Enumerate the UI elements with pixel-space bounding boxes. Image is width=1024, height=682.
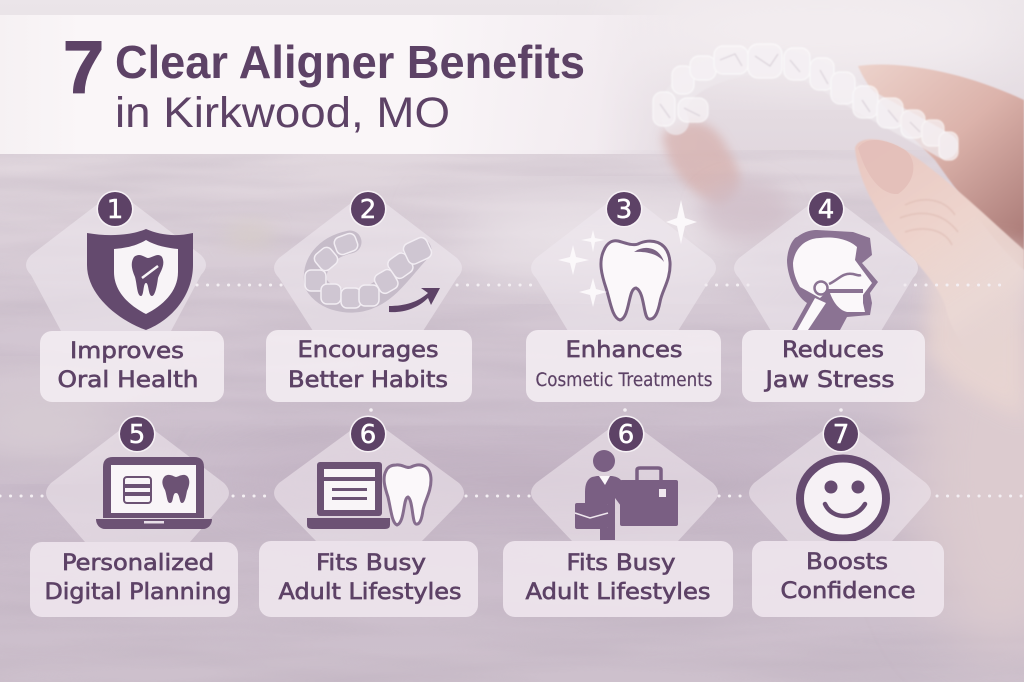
label: improves oral health: Improves [70, 339, 184, 364]
badge number 6: 6 [360, 420, 376, 450]
badge number 4: 4 [818, 195, 834, 225]
panel: benefit 4 reduces jaw stress [734, 190, 925, 402]
aligner tray [653, 44, 958, 160]
soft shadow under rear finger [700, 180, 790, 240]
panel: benefit 2 encourages better habits [266, 190, 472, 402]
badge number 1 [96, 190, 134, 228]
title numeral: 7 [63, 26, 104, 109]
badge number 4 [808, 190, 844, 228]
badge number 7 [822, 416, 860, 452]
title line one: Clear Aligner Benefits [115, 36, 585, 88]
badge number 3 [606, 190, 642, 228]
icon: shield with tooth [87, 229, 193, 330]
label: personalized digital planning: Digital Planning [44, 580, 232, 605]
label: reduces jaw stress: Reduces [782, 338, 884, 363]
badge number 1: 1 [107, 195, 123, 225]
label: fits busy adult lifestyles: Adult Lifestyles [278, 580, 462, 605]
badge number 5: 5 [129, 420, 145, 450]
icon: laptop with tooth plan [96, 457, 212, 529]
label: fits busy adult lifestyles second [503, 541, 733, 617]
icon: clear aligner with arrow [305, 232, 440, 312]
label: fits busy adult lifestyles [259, 541, 478, 617]
label: encourages better habits [266, 330, 472, 402]
badge number 2: 2 [360, 195, 376, 225]
badge number 5 [118, 416, 156, 452]
label: reduces jaw stress: Jaw Stress [763, 368, 894, 393]
icon: laptop and tooth [307, 462, 431, 529]
badge number 6 second: 6 [618, 420, 634, 450]
label: boosts confidence [752, 541, 944, 617]
label: encourages better habits: Better Habits [288, 368, 448, 393]
badge number 2 [350, 190, 386, 228]
badge number 3: 3 [616, 195, 632, 225]
label: improves oral health: Oral Health [58, 368, 198, 393]
title line two: in Kirkwood, MO [115, 89, 450, 137]
label: reduces jaw stress [742, 330, 925, 402]
label: boosts confidence: Boosts [806, 550, 888, 575]
label: encourages better habits: Encourages [298, 338, 438, 363]
label: fits busy adult lifestyles: Fits Busy [316, 551, 426, 576]
blurred rear fingertip [662, 122, 740, 205]
label: enhances cosmetic treatments [526, 330, 721, 402]
thumb creases [900, 200, 958, 245]
label: personalized digital planning: Personalized [62, 551, 214, 576]
panel: benefit 6 duplicate, person with briefcases [503, 416, 733, 617]
icon: businessperson with briefcases [575, 450, 678, 540]
thumb nail [858, 140, 913, 194]
icon: head profile showing jaw [787, 230, 878, 330]
index finger and palm shadow [858, 64, 1024, 270]
title band [0, 15, 700, 154]
label: boosts confidence: Confidence [780, 579, 916, 604]
icon: sparkling tooth [558, 200, 697, 320]
badge number 6 second [608, 416, 644, 452]
photo: hand holding clear aligner [653, 44, 1024, 420]
label: enhances cosmetic treatments: Cosmetic Treatments [536, 369, 712, 391]
dotted connector row one [197, 284, 1003, 286]
label: improves oral health [40, 331, 224, 402]
panel: benefit 5 personalized digital planning [30, 416, 238, 617]
label: fits busy adult lifestyles second: Adult Lifestyles [526, 580, 710, 605]
thumb [855, 139, 1024, 390]
icon: smiley face [800, 458, 886, 538]
panel: benefit 6 fits busy adult lifestyles [259, 416, 478, 617]
connector dots between rows [369, 408, 843, 412]
panel: benefit 3 enhances cosmetic treatments [526, 190, 721, 402]
panel: benefit 1 improves oral health [26, 190, 224, 402]
label: personalized digital planning [30, 542, 238, 617]
badge number 6 [350, 416, 386, 452]
panel: benefit 7 boosts confidence [749, 416, 944, 617]
palm fade [925, 243, 1024, 420]
label: fits busy adult lifestyles second: Fits Busy [566, 551, 676, 576]
label: enhances cosmetic treatments: Enhances [566, 338, 682, 363]
dotted connector row two [0, 494, 1024, 498]
badge number 7: 7 [833, 420, 849, 450]
